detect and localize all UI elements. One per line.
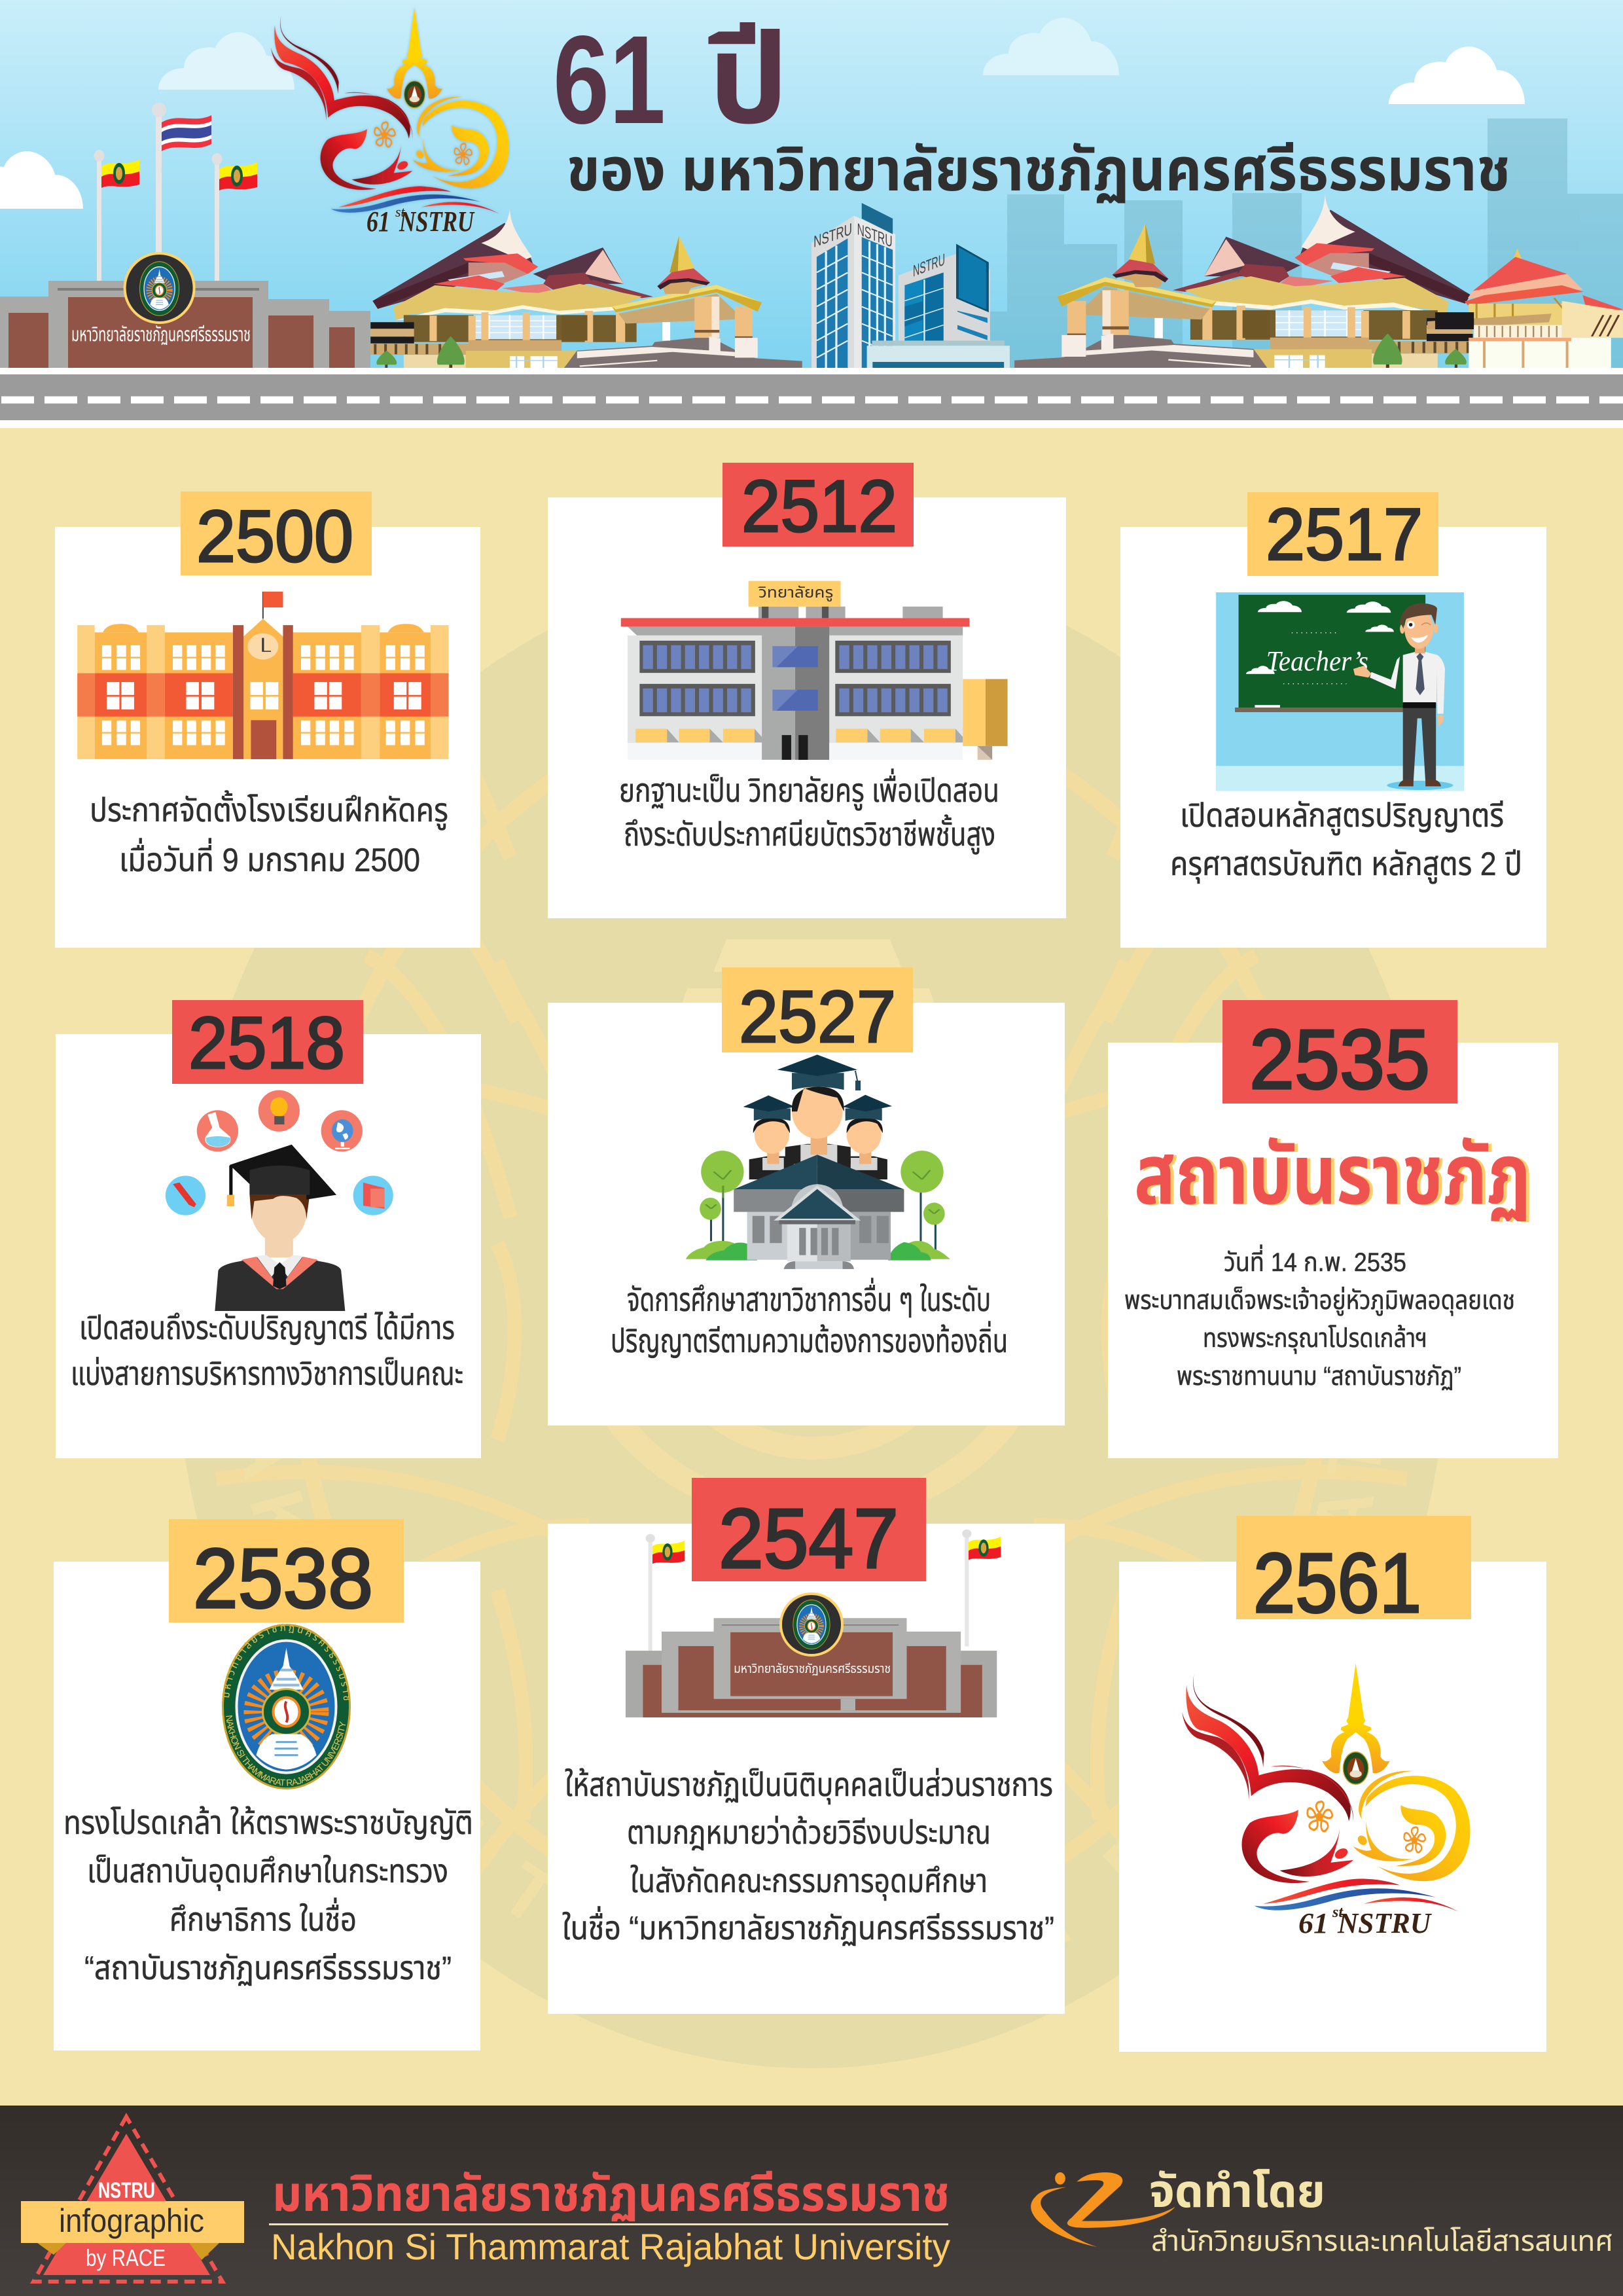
icon: university seal: NAKHON SI THAMMARAT RAJABHAT UNIVERSITY: [226, 1715, 346, 1786]
title: 61 years: 61: [553, 9, 666, 150]
text 2538: [63, 1804, 473, 1986]
year badge 2527: 2527: [739, 976, 896, 1058]
badge: NSTRU infographic by RACE: by RACE: [86, 2244, 166, 2271]
icon: gate with flags: มหาวิทยาลัยราชภัฏนครศรีธรรมราช: [734, 1662, 891, 1676]
red roof pavilion: [1427, 248, 1623, 368]
text 2527: ปริญญาตรีตามความต้องการของท้องถิ่น: [611, 1321, 1008, 1359]
icon: college building: [621, 581, 1008, 760]
badge: NSTRU infographic by RACE: NSTRU: [98, 2178, 155, 2203]
text 2517: [1170, 797, 1522, 884]
year badge 2517: 2517: [1266, 493, 1423, 575]
badge: NSTRU infographic by RACE: infographic: [59, 2202, 204, 2239]
university name: [269, 2166, 950, 2267]
text 2527: [611, 1278, 1008, 1359]
heading: Rajabhat Institute: สถาบันราชภัฏ: [1134, 1128, 1531, 1222]
text 2535: พระบาทสมเด็จพระเจ้าอยู่หัวภูมิพลอดุลยเดช: [1124, 1286, 1515, 1316]
text 2535: ทรงพระกรุณาโปรดเกล้าฯ: [1203, 1324, 1427, 1354]
icon: teacher at chalkboard: [1216, 592, 1464, 791]
Thai style building right (mirrored): [1014, 194, 1473, 368]
icon: university seal: มหาวิทยาลัยราชภัฏนครศรีธรรมราช: [224, 1623, 349, 1700]
footer: [0, 2106, 1623, 2296]
university name: มหาวิทยาลัยราชภัฏนครศรีธรรมราช: [272, 2166, 950, 2222]
panel: 2527: [548, 967, 1065, 1426]
panel: 2547: [548, 1478, 1065, 2014]
text 2500: ประกาศจัดตั้งโรงเรียนฝึกหัดครู: [90, 790, 448, 830]
text 2517: ครุศาสตรบัณฑิต หลักสูตร 2 ปี: [1170, 846, 1522, 884]
icon: gate with flags: [626, 1530, 1001, 1717]
text 2535: วันที่ 14 ก.พ. 2535: [1224, 1244, 1406, 1277]
panel: 2561: [1119, 1516, 1546, 2052]
panel: 2517: [1120, 492, 1546, 948]
title: [553, 9, 1510, 204]
modern NSTRU buildings: NSTRU: [913, 250, 945, 281]
text 2518: เปิดสอนถึงระดับปริญญาตรี ได้มีการ: [79, 1310, 455, 1346]
text 2518: แบ่งสายการบริหารทางวิชาการเป็นคณะ: [71, 1355, 463, 1392]
year badge 2518: 2518: [188, 1002, 345, 1084]
panel: 2535: [1108, 1000, 1558, 1458]
text 2527: จัดการศึกษาสาขาวิชาการอื่น ๆ ในระดับ: [627, 1278, 991, 1318]
anniversary logo: NSTRU: [1337, 1907, 1432, 1939]
anniversary logo (header): 61: [366, 206, 390, 238]
road: [0, 368, 1623, 428]
text 2512: ยกฐานะเป็น วิทยาลัยครู เพื่อเปิดสอน: [619, 768, 999, 810]
text 2538: “สถาบันราชภัฏนครศรีธรรมราช”: [84, 1950, 452, 1986]
anniversary logo (header): NSTRU: [399, 206, 475, 238]
year badge 2547: [692, 1478, 926, 1586]
anniversary logo: st: [1332, 1904, 1344, 1921]
text 2547: ในชื่อ “มหาวิทยาลัยราชภัฏนครศรีธรรมราช”: [562, 1906, 1054, 1946]
text 2538: ศึกษาธิการ ในชื่อ: [169, 1897, 357, 1938]
university gate: [0, 253, 370, 368]
flagpoles and flags: [94, 103, 257, 281]
text 2538: ทรงโปรดเกล้า ให้ตราพระราชบัญญัติ: [63, 1804, 473, 1841]
text 2535: [1124, 1244, 1515, 1391]
anniversary logo (header): [271, 7, 509, 238]
modern NSTRU buildings: NSTRU: [857, 221, 893, 251]
credit text: [1149, 2166, 1613, 2257]
text 2500: [90, 790, 448, 878]
credit text: จัดทำโดย: [1149, 2166, 1325, 2217]
anniversary logo (header): st: [395, 204, 406, 220]
badge: NSTRU infographic by RACE: [21, 2117, 244, 2282]
year badge 2547: 2547: [719, 1492, 899, 1586]
year badge 2512: 2512: [741, 465, 897, 547]
university gate: มหาวิทยาลัยราชภัฏนครศรีธรรมราช: [71, 324, 251, 346]
Thai flag: [162, 115, 211, 151]
icon: graduate with subject icons: [166, 1090, 393, 1311]
text 2547: ให้สถาบันราชภัฏเป็นนิติบุคคลเป็นส่วนราชการ: [565, 1767, 1053, 1804]
title: 61 years: [553, 9, 789, 150]
modern NSTRU buildings: [812, 203, 1010, 368]
icon: school building: [77, 592, 449, 759]
header sky: [0, 0, 1623, 368]
panel: 2512: [548, 463, 1066, 918]
panel: 2518: [56, 1000, 481, 1458]
text 2547: ในสังกัดคณะกรรมการอุดมศึกษา: [630, 1863, 988, 1901]
title: 61 years: ปี: [708, 9, 789, 149]
icon: teacher at chalkboard: Teacher’s: [1266, 646, 1368, 677]
text 2500: เมื่อวันที่ 9 มกราคม 2500: [119, 838, 420, 878]
year badge 2500: 2500: [196, 495, 353, 577]
year badge 2561: [1236, 1516, 1471, 1630]
text 2547: ตามกฎหมายว่าด้วยวิธีงบประมาณ: [627, 1814, 991, 1851]
year badge 2561: 2561: [1253, 1536, 1421, 1630]
year badge 2538: 2538: [193, 1532, 373, 1626]
panel: 2500: [55, 492, 480, 948]
icon: university seal: [222, 1623, 351, 1789]
text 2535: พระราชทานนาม “สถาบันราชภัฏ”: [1177, 1362, 1461, 1391]
university name: Nakhon Si Thammarat Rajabhat University: [271, 2226, 950, 2267]
text 2518: [71, 1310, 463, 1392]
icon: orange swoosh logo: [1031, 2172, 1175, 2247]
faded city skyline: [990, 118, 1623, 368]
Thai style building left: [370, 209, 802, 368]
anniversary logo: [1182, 1663, 1471, 1939]
text 2547: [562, 1767, 1054, 1946]
heading: Rajabhat Institute: สถาบันราชภัฏ: [1137, 1129, 1534, 1223]
text 2512: [619, 768, 999, 854]
text 2512: ถึงระดับประกาศนียบัตรวิชาชีพชั้นสูง: [624, 814, 995, 854]
clouds: [0, 18, 1525, 209]
anniversary logo: 61: [1298, 1907, 1329, 1939]
modern NSTRU buildings: NSTRU: [813, 219, 852, 251]
panel: 2538: [54, 1519, 480, 2051]
icon: graduates over campus building: [686, 1054, 950, 1269]
credit text: สำนักวิทยบริการและเทคโนโลยีสารสนเทศ: [1151, 2225, 1613, 2257]
year badge 2535: 2535: [1249, 1013, 1430, 1107]
text 2538: เป็นสถาบันอุดมศึกษาในกระทรวง: [87, 1853, 448, 1891]
text 2517: เปิดสอนหลักสูตรปริญญาตรี: [1180, 797, 1504, 835]
icon: college building: วิทยาลัยครู: [758, 584, 833, 601]
title: university name: ของ มหาวิทยาลัยราชภัฏนครศรีธรรมราช: [567, 137, 1510, 204]
